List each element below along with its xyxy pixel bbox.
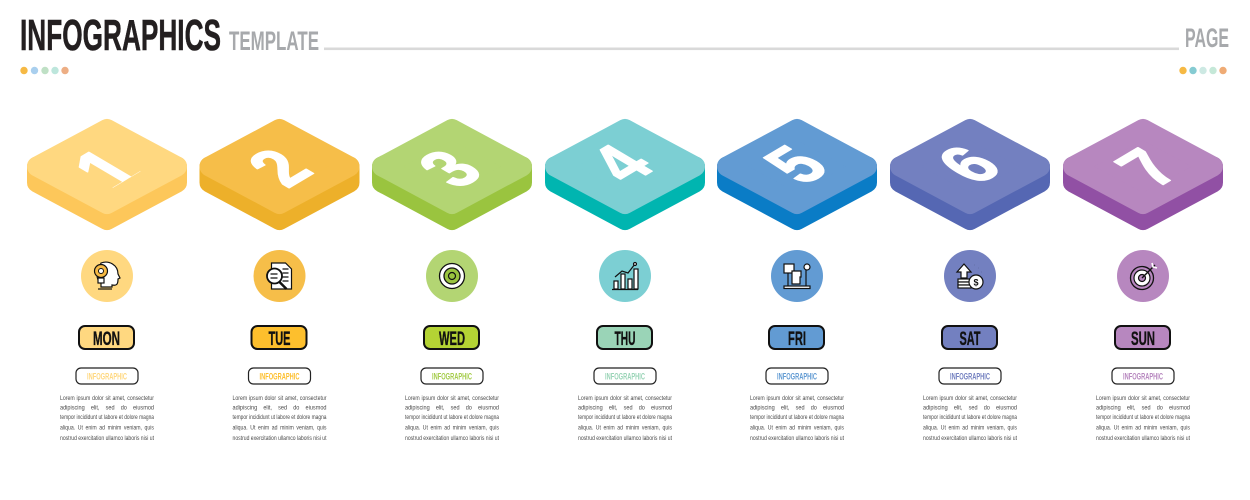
day badge: SUN (1131, 329, 1155, 350)
description: aliqua. Ut enim ad minim veniam, quis (60, 424, 155, 432)
tag: INFOGRAPHIC (777, 372, 817, 382)
description: adipiscing elit, sed do eiusmod (232, 404, 327, 412)
description: aliqua. Ut enim ad minim veniam, quis (750, 424, 845, 432)
description: nostrud exercitation ullamco laboris nisi ut (1096, 435, 1190, 442)
block 3 (382, 129, 522, 220)
day badge (252, 326, 306, 350)
day badge (79, 326, 134, 350)
block 4: 4 (572, 134, 671, 193)
block 1: 1 (53, 137, 166, 204)
description: Lorem ipsum dolor sit amet, consectetur (60, 395, 155, 402)
description: Lorem ipsum dolor sit amet, consectetur (750, 395, 845, 402)
description (1096, 395, 1191, 442)
block 7 (1073, 129, 1213, 220)
description: Lorem ipsum dolor sit amet, consectetur (1096, 395, 1191, 402)
day badge: THU (614, 329, 636, 350)
day badge (424, 326, 479, 350)
block 2: 2 (230, 138, 330, 197)
description (405, 395, 500, 442)
column 2: Tuesday (210, 129, 350, 442)
description: nostrud exercitation ullamco laboris nisi ut (578, 435, 672, 442)
block 5: 5 (747, 135, 846, 194)
description: adipiscing elit, sed do eiusmod (1096, 404, 1190, 412)
tag: INFOGRAPHIC (605, 372, 645, 382)
tag (766, 368, 828, 384)
description: nostrud exercitation ullamco laboris nisi ut (923, 435, 1017, 442)
tag (594, 368, 656, 384)
description: tempor incididunt ut labore et dolore magna (750, 414, 844, 421)
icon: target with arrow (1117, 250, 1169, 302)
block 5 (727, 129, 867, 220)
description: aliqua. Ut enim ad minim veniam, quis (405, 424, 500, 432)
description: tempor incididunt ut labore et dolore magna (232, 414, 327, 421)
description: adipiscing elit, sed do eiusmod (60, 404, 154, 412)
day badge: TUE (268, 329, 290, 350)
block 6 (900, 129, 1040, 220)
description: adipiscing elit, sed do eiusmod (405, 404, 499, 412)
block 2 (210, 129, 350, 220)
icon: document and magnifier (254, 250, 306, 302)
tag (76, 368, 138, 384)
day badge: MON (93, 329, 120, 350)
description (923, 395, 1018, 442)
day badge (769, 326, 824, 350)
description: aliqua. Ut enim ad minim veniam, quis (232, 424, 327, 432)
icon: rising bar chart (599, 250, 651, 302)
icon: head with light bulb (81, 250, 133, 302)
tag: INFOGRAPHIC (1123, 372, 1163, 382)
day badge: FRI (788, 329, 806, 350)
description: tempor incididunt ut labore et dolore magna (1096, 414, 1190, 421)
dots left (20, 67, 69, 74)
description: Lorem ipsum dolor sit amet, consectetur (578, 395, 673, 402)
column 6: Saturday (900, 129, 1040, 442)
tag: INFOGRAPHIC (87, 372, 127, 382)
tag: INFOGRAPHIC (432, 372, 472, 382)
day badge (942, 326, 997, 350)
block 6: 6 (920, 135, 1019, 194)
description: Lorem ipsum dolor sit amet, consectetur (923, 395, 1018, 402)
icon: coins with up arrow (944, 250, 996, 302)
block 3: 3 (401, 139, 500, 198)
description (60, 395, 155, 442)
description: aliqua. Ut enim ad minim veniam, quis (923, 424, 1018, 432)
day badge (1115, 326, 1170, 350)
description (578, 395, 673, 442)
description: tempor incididunt ut labore et dolore magna (60, 414, 154, 421)
description: adipiscing elit, sed do eiusmod (923, 404, 1017, 412)
description: tempor incididunt ut labore et dolore magna (578, 414, 672, 421)
icon: presenter at desk (771, 250, 823, 302)
description: nostrud exercitation ullamco laboris nisi ut (405, 435, 499, 442)
column 1: Monday (37, 129, 177, 442)
description: tempor incididunt ut labore et dolore magna (923, 414, 1017, 421)
description: Lorem ipsum dolor sit amet, consectetur (405, 395, 500, 402)
description: aliqua. Ut enim ad minim veniam, quis (578, 424, 673, 432)
description: nostrud exercitation ullamco laboris nisi ut (750, 435, 844, 442)
header (20, 11, 1229, 74)
tag: INFOGRAPHIC (950, 372, 990, 382)
block 7: 7 (1099, 138, 1198, 197)
icon: gear with cycle arrows (426, 250, 478, 302)
description: adipiscing elit, sed do eiusmod (578, 404, 672, 412)
day badge: WED (439, 329, 465, 350)
tag: INFOGRAPHIC (260, 372, 300, 382)
description (750, 395, 845, 442)
subtitle: TEMPLATE (229, 26, 319, 56)
description: nostrud exercitation ullamco laboris nisi ut (60, 435, 154, 442)
column 4: Thursday (555, 129, 695, 442)
column 5: Friday (727, 129, 867, 442)
title: INFOGRAPHICS (20, 11, 221, 60)
description (232, 395, 327, 442)
column 3: Wednesday (382, 129, 522, 442)
description: nostrud exercitation ullamco laboris nisi ut (232, 435, 327, 442)
tag (1112, 368, 1174, 384)
block 4 (555, 129, 695, 220)
dots right (1179, 67, 1227, 74)
tag (421, 368, 483, 384)
description: aliqua. Ut enim ad minim veniam, quis (1096, 424, 1191, 432)
description: tempor incididunt ut labore et dolore magna (405, 414, 499, 421)
column 7: Sunday (1073, 129, 1213, 442)
icon: coins with up arrow: $ (974, 278, 979, 288)
day badge: SAT (960, 329, 981, 350)
description: adipiscing elit, sed do eiusmod (750, 404, 844, 412)
block 1 (37, 129, 177, 220)
tag (248, 368, 310, 384)
day badge (597, 326, 652, 350)
description: Lorem ipsum dolor sit amet, consectetur (232, 395, 327, 402)
tag (939, 368, 1001, 384)
